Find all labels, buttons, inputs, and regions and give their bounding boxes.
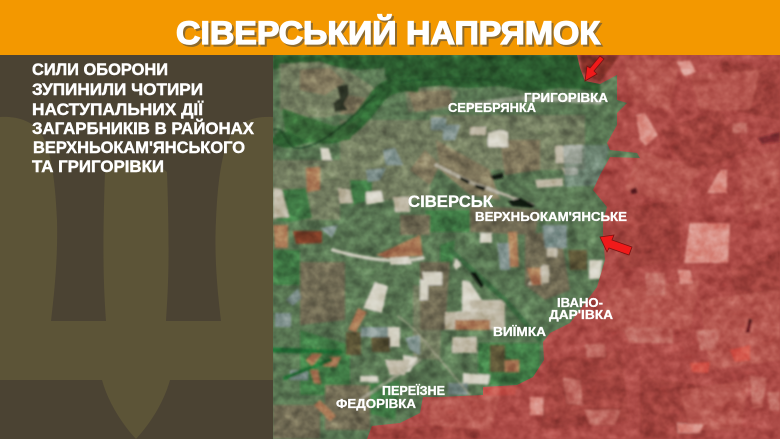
- river woodland band: [275, 83, 420, 140]
- heading: left panel description: ТА ГРИГОРІВКИ: [32, 158, 164, 176]
- heading: left panel description: СИЛИ ОБОРОНИ: [32, 61, 168, 79]
- ponds: [460, 173, 535, 288]
- label: Івано-Дар'ївка: ІВАНО-: [557, 296, 603, 310]
- heading: left panel description: НАСТУПАЛЬНИХ ДІЇ: [32, 101, 203, 119]
- title: СІВЕРСЬКИЙ НАПРЯМОК: [176, 15, 600, 51]
- heading: left panel description: ЗУПИНИЛИ ЧОТИРИ: [32, 81, 203, 99]
- label: Федорівка: ФЕДОРІВКА: [336, 397, 416, 411]
- label: Переїзне: ПЕРЕЇЗНЕ: [382, 383, 445, 398]
- field mottling texture: [273, 55, 780, 439]
- label: Виїмка: ВИЇМКА: [493, 324, 546, 339]
- heading: left panel description: ЗАГАРБНИКІВ В РАЙОНАХ: [32, 119, 254, 138]
- label: Серебрянка: СЕРЕБРЯНКА: [448, 101, 536, 115]
- field patches: [273, 180, 540, 420]
- label: Верхньокам'янське: ВЕРХНЬОКАМ'ЯНСЬКЕ: [475, 210, 627, 224]
- icon: trident watermark: [0, 117, 273, 439]
- label: Сіверськ: СІВЕРСЬК: [408, 192, 494, 211]
- arrow: towards Verkhnokamianske: [600, 235, 632, 255]
- heading: left panel description: ВЕРХНЬОКАМ'ЯНСЬКОГО: [33, 139, 245, 157]
- heading: left panel description: [32, 61, 254, 176]
- label: Григорівка: ГРИГОРІВКА: [524, 91, 608, 105]
- texture grain: [273, 55, 780, 439]
- forest: northern woodland: [273, 55, 600, 95]
- panel: left text panel background: [0, 55, 273, 439]
- map: occupied territory in red: [367, 55, 780, 439]
- map labels: [336, 91, 627, 411]
- roads and settlements: [273, 98, 600, 400]
- title banner: [0, 0, 780, 55]
- arrow: towards Hryhorivka: [585, 56, 604, 81]
- title shadow: СІВЕРСЬКИЙ НАПРЯМОК: [178, 17, 602, 53]
- label: Івано-Дар'ївка: ДАР'ІВКА: [549, 308, 613, 322]
- map: satellite view with occupied territory: [273, 55, 780, 439]
- label: Івано-Дар'ївка: [549, 296, 613, 322]
- dark clearing: [333, 84, 349, 112]
